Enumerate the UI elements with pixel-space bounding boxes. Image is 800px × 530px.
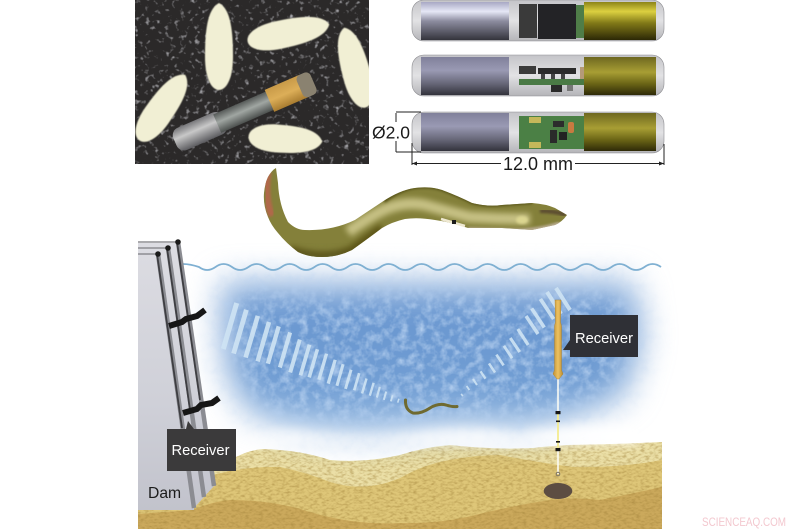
mooring line (557, 378, 559, 474)
panel: photo of tag beside rice grains (128, 0, 379, 164)
dimension: diameter (372, 112, 421, 152)
callout: lake receiver (563, 315, 638, 357)
white fade between water and sand (240, 427, 640, 442)
mounted receiver upper (169, 310, 205, 326)
sand bed (138, 442, 662, 529)
tag view: bottom (412, 112, 664, 153)
dam wall (138, 243, 214, 510)
photo background (135, 0, 369, 164)
moored receiver on lake bed (544, 300, 572, 499)
dimension: diameter: Ø2.0 (372, 122, 410, 142)
receiver body (553, 300, 563, 379)
callout: dam receiver: Receiver (172, 443, 230, 459)
pole caps (155, 239, 181, 257)
water surface wave (183, 264, 661, 270)
anchor ring (556, 472, 560, 476)
small eel in water (405, 400, 457, 413)
signal beam to dam receiver (223, 303, 399, 403)
water body (222, 284, 640, 434)
tag view: middle (412, 55, 664, 96)
rice grains (128, 3, 379, 156)
mounted receiver lower (183, 398, 219, 413)
watermark: SCIENCEAQ.COM (702, 517, 786, 529)
dam poles (157, 242, 214, 508)
panel: tag cutaway renderings (372, 0, 664, 174)
line floats (556, 411, 560, 451)
eel photo with implanted tag (264, 168, 567, 257)
anchor disc (544, 483, 572, 499)
signal beam to lake receiver (461, 288, 570, 396)
label: dam: Dam (148, 485, 181, 502)
tag inside eel (441, 219, 465, 226)
tag capsule in photo (170, 71, 318, 153)
tag view: top (412, 0, 664, 41)
callout: lake receiver: Receiver (575, 331, 633, 347)
dimension: length (412, 144, 664, 174)
dimension: length: 12.0 mm (503, 154, 573, 174)
dam with mounted receivers (138, 239, 219, 510)
dam top rails (138, 242, 178, 254)
callout: dam receiver (167, 421, 236, 471)
